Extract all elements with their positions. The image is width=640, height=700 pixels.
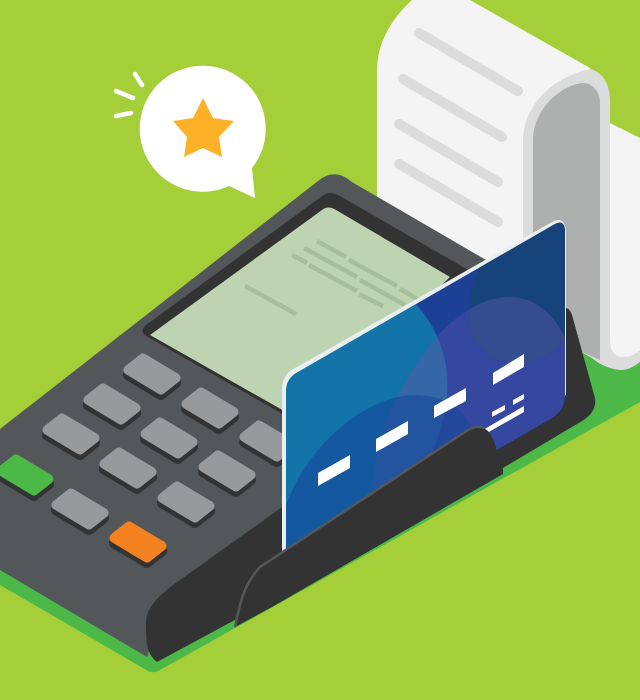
purple circle [398, 310, 565, 451]
sparkle lines [116, 74, 142, 116]
keypad [2, 358, 292, 562]
teal circle [286, 304, 437, 548]
card holder front [235, 427, 503, 627]
dark top right circle [469, 222, 565, 364]
receipt fold rim [523, 69, 640, 370]
grey keys [48, 358, 292, 524]
receipt printed lines [399, 33, 518, 222]
terminal body top surface [0, 174, 486, 657]
receipt main sheet [377, 0, 595, 335]
star icon [173, 98, 234, 157]
card white border [282, 220, 566, 560]
bubble [140, 66, 266, 198]
speech bubble with star [116, 66, 266, 198]
card base colour [286, 222, 565, 450]
dark circle overlap [470, 297, 565, 364]
card artwork [286, 222, 565, 548]
credit card [282, 220, 566, 551]
terminal side face [146, 430, 400, 662]
card number blocks [318, 354, 524, 486]
teal and purple overlap [373, 336, 448, 491]
LCD screen [150, 208, 450, 420]
lower blue circle [286, 395, 470, 548]
screen text lines [245, 241, 417, 314]
key shadows [2, 364, 292, 562]
receipt paper roll [377, 0, 640, 370]
screen bezel [142, 193, 470, 424]
receipt back sheet [610, 123, 640, 358]
holder highlight [235, 427, 484, 627]
card holder back [490, 308, 595, 468]
green base shadow [0, 320, 640, 672]
orange key [114, 526, 162, 558]
receipt fold inner shadow [533, 83, 600, 360]
holder shape [235, 427, 503, 627]
green key [2, 460, 48, 490]
